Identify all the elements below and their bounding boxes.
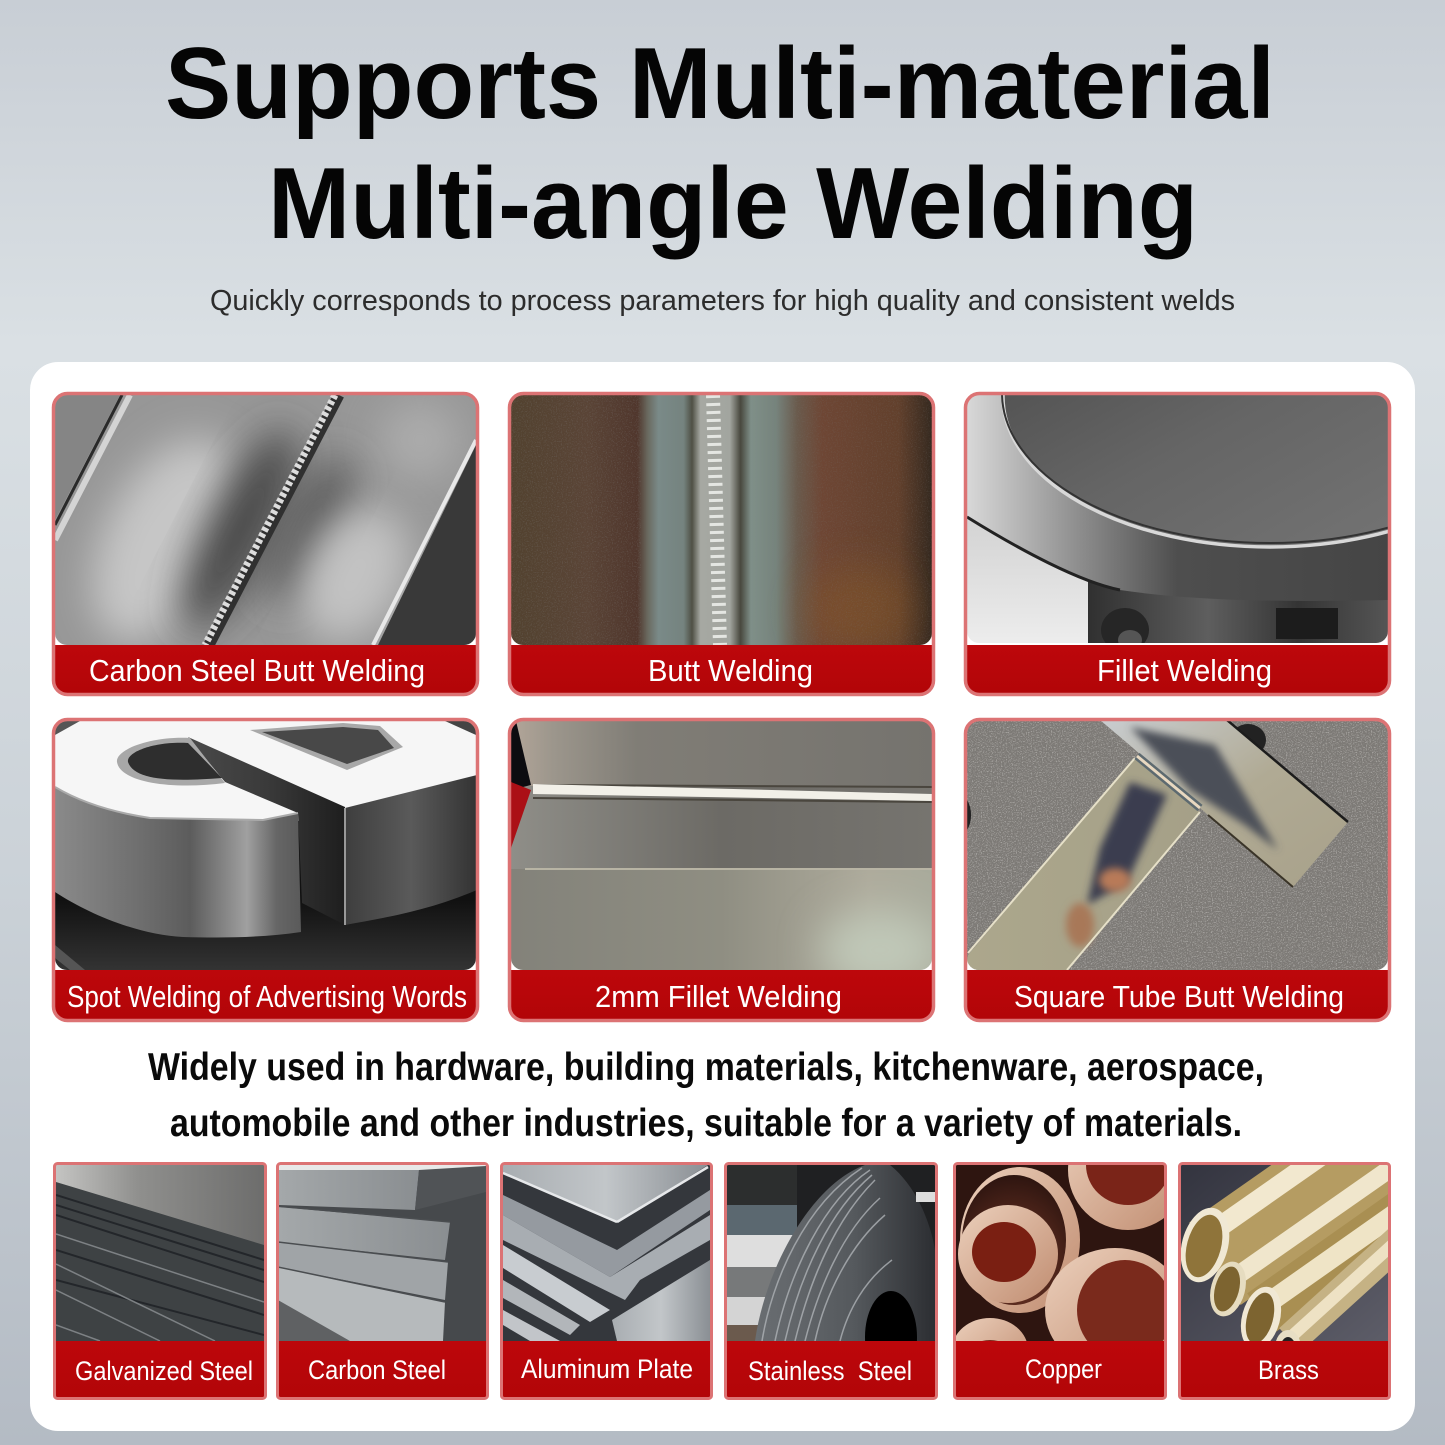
card: square tube butt welding bbox=[965, 720, 1390, 1020]
photo: carbon steel butt weld bbox=[55, 395, 476, 665]
caption bar bbox=[1181, 1341, 1388, 1397]
caption bar bbox=[511, 645, 932, 693]
caption: Spot Welding of Advertising Words bbox=[67, 979, 467, 1014]
caption: Square Tube Butt Welding bbox=[1014, 979, 1344, 1014]
caption bar bbox=[511, 970, 932, 1019]
caption bar bbox=[967, 645, 1388, 693]
photo: galvanized sheets bbox=[56, 1165, 264, 1341]
caption bar bbox=[56, 1341, 264, 1397]
frame bbox=[278, 1164, 488, 1398]
photo: copper rolls bbox=[956, 1165, 1164, 1341]
frame bbox=[510, 394, 934, 694]
photo: rusty butt weld bbox=[511, 395, 932, 655]
photo: stainless coil bbox=[727, 1165, 935, 1341]
caption bar bbox=[956, 1341, 1164, 1397]
title bbox=[165, 28, 1275, 260]
text block: industries statement: Widely used in hardware, building materials, kitchenware, aerospace, bbox=[148, 1046, 1264, 1089]
photo: round fillet weld bbox=[967, 395, 1388, 643]
frame bbox=[502, 1164, 712, 1398]
title: Multi-angle Welding bbox=[268, 148, 1198, 260]
caption: Fillet Welding bbox=[1097, 653, 1272, 688]
frame bbox=[1180, 1164, 1390, 1398]
material: carbon steel bbox=[278, 1164, 488, 1398]
caption: Aluminum Plate bbox=[521, 1354, 693, 1384]
caption: Galvanized Steel bbox=[75, 1356, 253, 1386]
caption: 2mm Fillet Welding bbox=[595, 979, 842, 1014]
caption bar bbox=[503, 1341, 710, 1397]
caption: Brass bbox=[1258, 1355, 1319, 1385]
material: copper bbox=[953, 1162, 1167, 1400]
panel: white content card bbox=[30, 362, 1415, 1431]
caption bar bbox=[727, 1341, 935, 1397]
material: brass bbox=[1178, 1162, 1391, 1400]
photo: 2mm fillet weld bbox=[511, 721, 940, 990]
frame bbox=[954, 1164, 1166, 1398]
frame bbox=[54, 394, 478, 694]
card: spot welding of advertising words bbox=[54, 720, 478, 1020]
caption: Stainless Steel bbox=[748, 1356, 912, 1386]
card: butt welding bbox=[510, 394, 934, 694]
material: aluminum plate bbox=[502, 1164, 712, 1398]
frame bbox=[54, 720, 478, 1020]
caption: Copper bbox=[1025, 1354, 1102, 1384]
text block: industries statement bbox=[148, 1046, 1264, 1145]
photo: metal letter bbox=[55, 721, 477, 970]
caption bar bbox=[967, 970, 1388, 1019]
caption bar bbox=[279, 1341, 486, 1397]
photo: carbon steel slabs bbox=[278, 1165, 486, 1341]
photo: aluminum sheets bbox=[503, 1165, 710, 1341]
title: Supports Multi-material bbox=[165, 28, 1275, 140]
frame bbox=[510, 720, 934, 1020]
caption bar bbox=[55, 645, 476, 693]
photo: square tube weld on concrete bbox=[965, 720, 1388, 970]
frame bbox=[726, 1164, 936, 1398]
caption: Carbon Steel bbox=[308, 1355, 446, 1385]
card: carbon steel butt welding bbox=[54, 394, 478, 694]
frame bbox=[54, 1164, 266, 1398]
material: galvanized steel bbox=[54, 1164, 266, 1398]
frame bbox=[966, 394, 1390, 694]
subtitle: Quickly corresponds to process parameters for high quality and consistent welds bbox=[210, 285, 1235, 317]
photo: brass tubes bbox=[1181, 1165, 1388, 1341]
card: 2mm fillet welding bbox=[510, 720, 940, 1020]
caption: Butt Welding bbox=[648, 653, 813, 688]
material: stainless steel bbox=[726, 1164, 936, 1398]
text block: industries statement: automobile and other industries, suitable for a variety of materials. bbox=[170, 1102, 1242, 1145]
frame bbox=[966, 720, 1390, 1020]
caption bar bbox=[55, 970, 476, 1019]
caption: Carbon Steel Butt Welding bbox=[89, 653, 425, 688]
card: fillet welding bbox=[964, 392, 1392, 696]
